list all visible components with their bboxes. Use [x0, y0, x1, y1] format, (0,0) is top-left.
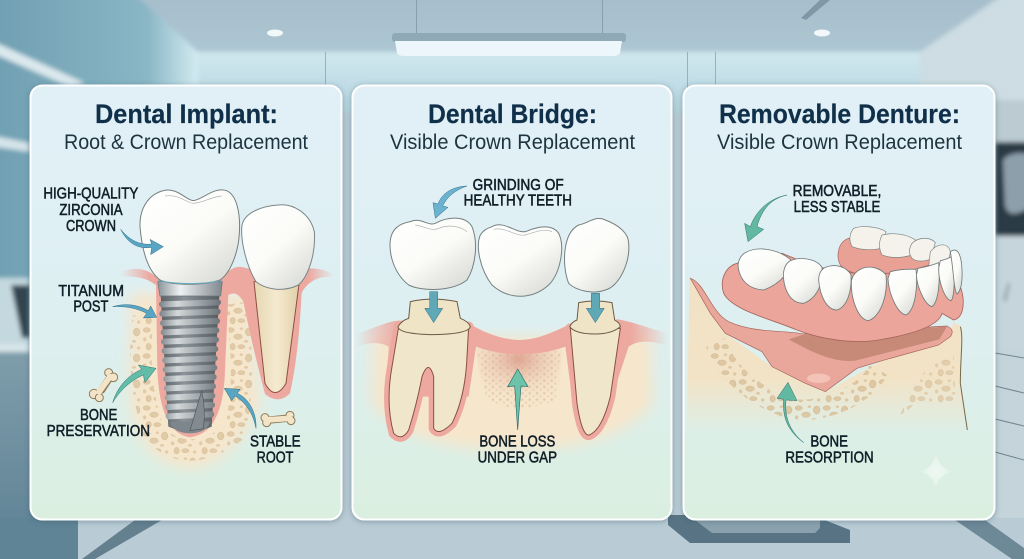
label: stable root: STABLE	[250, 434, 301, 451]
label: bone preservation: BONE	[80, 407, 117, 424]
label: titanium post	[58, 283, 124, 316]
icon: bone right	[261, 411, 295, 427]
label: bone preservation: PRESERVATION	[47, 423, 150, 440]
bone loss area	[475, 347, 562, 410]
arrow: removable	[745, 195, 787, 242]
arrow: bone resorption	[777, 382, 804, 443]
arrow: stable root	[224, 388, 256, 428]
label: removable, less stable: LESS STABLE	[794, 199, 880, 216]
label: bone preservation	[47, 407, 150, 440]
gum	[355, 319, 668, 397]
label: titanium post: POST	[73, 299, 109, 316]
label: removable, less stable	[793, 183, 881, 216]
jaw bone	[687, 277, 968, 433]
label: removable, less stable: REMOVABLE,	[793, 183, 881, 200]
heading: dental bridge: Visible Crown Replacement	[390, 131, 635, 154]
label: grinding of healthy teeth: HEALTHY TEETH	[464, 193, 572, 210]
panel: dental bridge	[352, 86, 672, 520]
label: high-quality zirconia crown	[43, 185, 138, 235]
heading: dental implant: Dental Implant:	[95, 99, 278, 129]
heading: removable denture	[717, 99, 962, 154]
illustration: bridge over gap	[355, 177, 668, 467]
denture front base	[722, 253, 963, 342]
illustration: denture over jaw	[687, 183, 968, 488]
label: titanium post: TITANIUM	[58, 283, 124, 300]
panel: dental implant	[30, 86, 342, 520]
label: high-quality zirconia crown: ZIRCONIA	[59, 202, 123, 219]
panel: removable denture	[684, 86, 994, 520]
label: high-quality zirconia crown: CROWN	[66, 218, 116, 235]
heading: removable denture: Removable Denture:	[719, 99, 960, 129]
arrow: left abutment	[425, 292, 443, 323]
label: grinding of healthy teeth: GRINDING OF	[473, 177, 564, 194]
label: stable root: ROOT	[257, 450, 294, 467]
arrow: right abutment	[586, 293, 604, 323]
heading: dental implant	[64, 99, 308, 154]
label: bone loss under gap: BONE LOSS	[479, 434, 555, 451]
heading: dental implant: Root & Crown Replacement	[64, 131, 308, 154]
implant post	[158, 282, 222, 433]
heading: dental bridge	[390, 99, 635, 154]
zirconia crown	[140, 190, 240, 284]
label: bone loss under gap	[478, 434, 557, 467]
label: bone resorption	[785, 434, 874, 467]
icon: sparkle	[919, 453, 953, 488]
icon: bone left	[89, 369, 118, 402]
arrow: crown	[121, 229, 163, 255]
label: bone resorption: RESORPTION	[785, 450, 874, 467]
heading: dental bridge: Dental Bridge:	[428, 99, 597, 129]
gum ridge	[690, 278, 952, 392]
gum	[120, 267, 334, 437]
denture back arch	[838, 227, 950, 276]
crown grooves	[415, 225, 552, 235]
arrow: bone loss	[508, 369, 528, 430]
label: bone loss under gap: UNDER GAP	[478, 450, 557, 467]
label: high-quality zirconia crown: HIGH-QUALITY	[43, 185, 138, 202]
arrow: grinding	[433, 186, 467, 218]
label: grinding of healthy teeth	[464, 177, 572, 210]
right tooth	[570, 301, 620, 435]
denture front teeth	[738, 249, 962, 321]
arrow: titanium post	[113, 305, 157, 318]
left molar	[389, 299, 470, 437]
natural tooth	[242, 205, 315, 392]
bridge crowns	[390, 218, 629, 296]
label: stable root	[250, 434, 301, 467]
label: bone resorption: BONE	[810, 434, 848, 451]
arrow: bone preservation	[113, 365, 156, 403]
heading: removable denture: Visible Crown Replacement	[717, 131, 962, 154]
illustration: implant in jaw	[43, 185, 334, 468]
